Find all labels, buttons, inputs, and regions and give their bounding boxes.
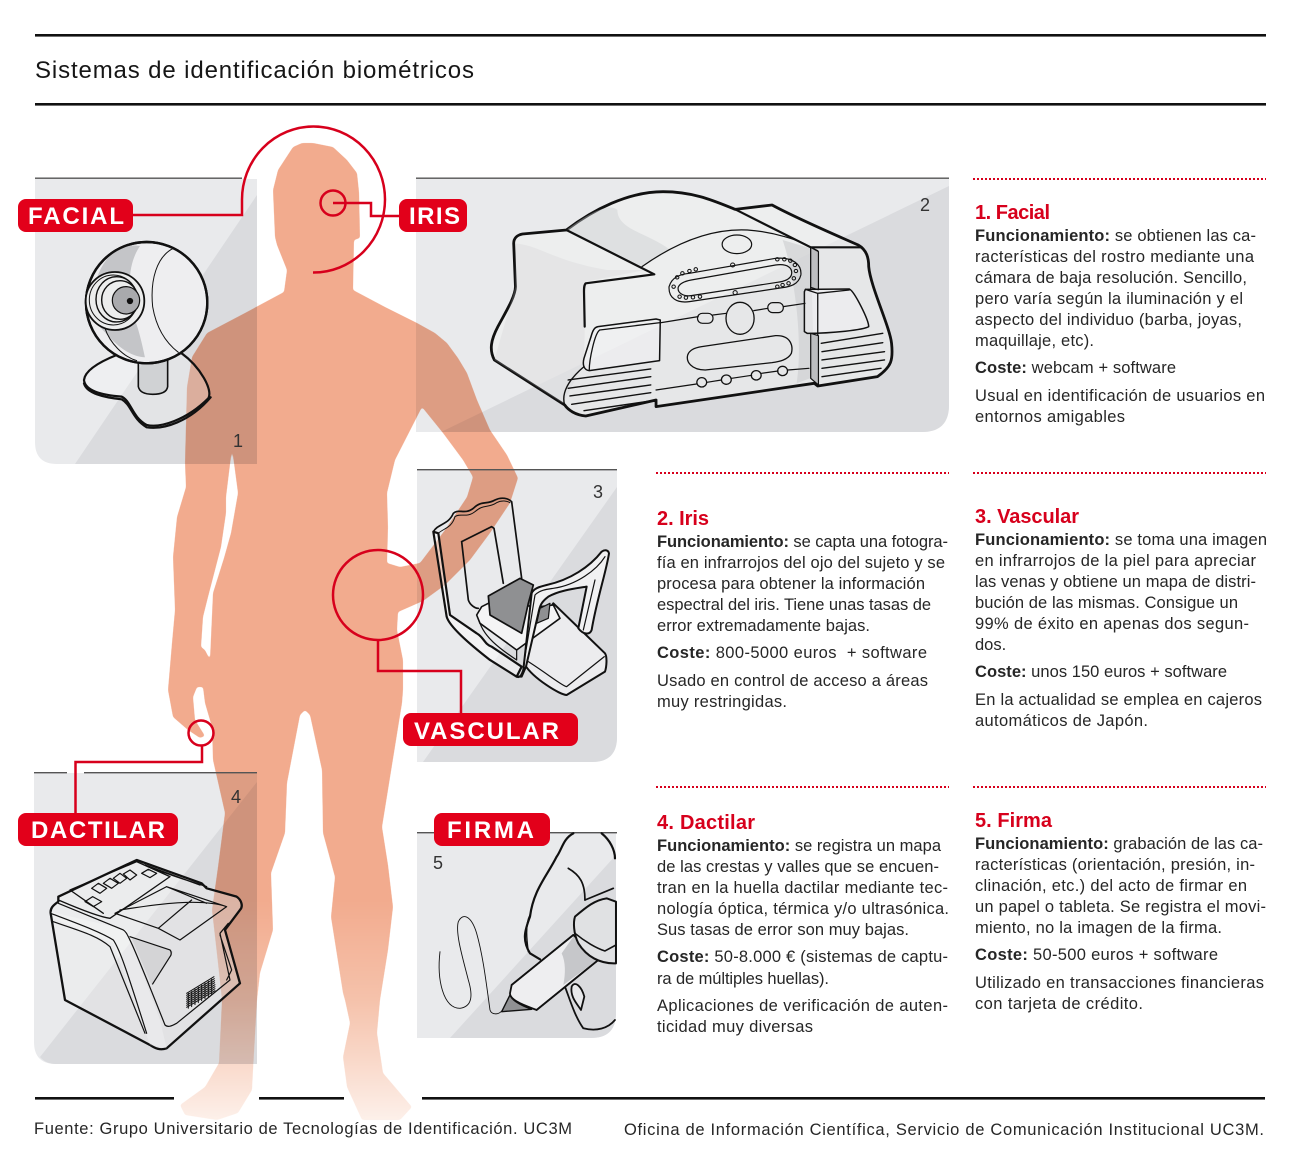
text block: 2. Iris: Funcionamiento: se capta una fotogra- <box>657 533 948 551</box>
text block: 5. Firma: Utilizado en transacciones financieras <box>975 974 1264 992</box>
text block: 5. Firma: miento, no la imagen de la firma. <box>975 919 1222 937</box>
text block: 2. Iris: 2. Iris <box>657 508 709 530</box>
connector: vascular <box>333 550 461 713</box>
footer rules <box>35 1097 1265 1100</box>
text block: 4. Dactilar <box>657 812 949 1036</box>
text block: 2. Iris: espectral del iris. Tiene unas tasas de <box>657 596 931 614</box>
title: Sistemas de identificación biométricos <box>35 57 474 84</box>
text block: 3. Vascular: las venas y obtiene un mapa de distri- <box>975 573 1256 591</box>
text block: 3. Vascular: dos. <box>975 636 1006 654</box>
text block: 2. Iris: error extremadamente bajas. <box>657 617 870 635</box>
icon: iris scanner <box>491 192 892 416</box>
label: FACIAL <box>18 199 133 232</box>
text block: 5. Firma: clinación, etc.) del acto de firmar en <box>975 877 1247 895</box>
text block: 4. Dactilar: nología óptica, térmica y/o ultrasónica. <box>657 900 949 918</box>
panel top rules <box>34 178 949 833</box>
text block: 3. Vascular: En la actualidad se emplea en cajeros <box>975 691 1262 709</box>
text block: 3. Vascular: en infrarrojos de la piel para apreciar <box>975 552 1256 570</box>
text block: 5. Firma: con tarjeta de crédito. <box>975 995 1143 1013</box>
panel: dactilar background <box>34 773 257 1064</box>
panel: firma background <box>417 833 616 1038</box>
text block: 2. Iris: muy restringidas. <box>657 693 787 711</box>
panel numbers: 5 <box>433 853 443 873</box>
text block: 5. Firma <box>975 810 1266 1013</box>
panel: facial background <box>35 179 257 464</box>
text block: 2. Iris <box>657 508 948 711</box>
text block: 4. Dactilar: de las crestas y valles que se encuen- <box>657 858 939 876</box>
header rules <box>35 34 1266 106</box>
text block: 1. Facial: entornos amigables <box>975 408 1125 426</box>
panel: vascular background <box>417 470 617 762</box>
text block: 1. Facial: Coste: webcam + software <box>975 359 1176 377</box>
connector: facial <box>133 127 385 273</box>
label: IRIS: IRIS <box>409 203 460 230</box>
text block: 1. Facial: aspecto del individuo (barba, joyas, <box>975 311 1242 329</box>
panel numbers: 3 <box>593 482 603 502</box>
text block: 3. Vascular: 99% de éxito en apenas dos segun- <box>975 615 1249 633</box>
text block: 3. Vascular: bución de las mismas. Consigue un <box>975 594 1238 612</box>
text block: 4. Dactilar: Aplicaciones de verificación de auten- <box>657 997 948 1015</box>
text block: 2. Iris: Usado en control de acceso a áreas <box>657 672 928 690</box>
text block: 4. Dactilar: ra de múltiples huellas). <box>657 970 829 988</box>
text block: 5. Firma: 5. Firma <box>975 810 1053 832</box>
text block: 5. Firma: Coste: 50-500 euros + software <box>975 946 1218 964</box>
text block: 2. Iris: fía en infrarrojos del ojo del sujeto y se <box>657 554 945 572</box>
connector: iris <box>320 190 399 216</box>
text block: 4. Dactilar: Coste: 50-8.000 € (sistemas de captu- <box>657 948 948 966</box>
icon: hand signing with pen <box>439 833 616 1030</box>
label: FIRMA <box>434 813 550 846</box>
label: VASCULAR <box>403 713 578 746</box>
text block: 1. Facial: Funcionamiento: se obtienen las ca- <box>975 227 1256 245</box>
text block: 4. Dactilar: tran en la huella dactilar mediante tec- <box>657 879 948 897</box>
text block: 1. Facial: pero varía según la iluminación y el <box>975 290 1243 308</box>
panel numbers: 2 <box>920 195 930 215</box>
text block: 1. Facial <box>975 202 1265 426</box>
text block: 1. Facial: cámara de baja resolución. Sencillo, <box>975 269 1247 287</box>
text block: 4. Dactilar: Funcionamiento: se registra un mapa <box>657 837 942 855</box>
text block: 2. Iris: procesa para obtener la información <box>657 575 925 593</box>
text block: 3. Vascular: automáticos de Japón. <box>975 712 1148 730</box>
label: DACTILAR <box>18 813 178 846</box>
text block: 1. Facial: racterísticas del rostro mediante una <box>975 248 1255 266</box>
text block: 1. Facial: 1. Facial <box>975 202 1050 224</box>
icon: vascular hand scanner <box>433 498 609 695</box>
panel numbers: 1 <box>233 431 243 451</box>
label: IRIS <box>399 199 467 232</box>
footer: source: Fuente: Grupo Universitario de Tecnologías de Identificación. UC3M <box>34 1120 572 1138</box>
text block: 1. Facial: maquillaje, etc). <box>975 332 1094 350</box>
label: FIRMA: FIRMA <box>447 817 534 844</box>
dotted separators <box>656 179 1266 787</box>
text block: 4. Dactilar: ticidad muy diversas <box>657 1018 813 1036</box>
panel numbers <box>231 195 930 873</box>
label: FACIAL: FACIAL <box>28 203 124 230</box>
panel numbers: 4 <box>231 787 241 807</box>
text block: 3. Vascular <box>975 506 1267 730</box>
text block: 3. Vascular: Coste: unos 150 euros + software <box>975 663 1227 681</box>
label: VASCULAR: VASCULAR <box>414 718 559 745</box>
panel: iris background <box>416 179 949 432</box>
text block: 3. Vascular: Funcionamiento: se toma una imagen <box>975 531 1267 549</box>
text block: 4. Dactilar: 4. Dactilar <box>657 812 755 834</box>
icon: fingerprint reader <box>51 860 242 1049</box>
human body silhouette <box>168 143 518 1120</box>
text block: 5. Firma: Funcionamiento: grabación de las ca- <box>975 835 1263 853</box>
text block: 3. Vascular: 3. Vascular <box>975 506 1079 528</box>
label: DACTILAR: DACTILAR <box>31 817 165 844</box>
icon: webcam <box>84 242 211 428</box>
text block: 2. Iris: Coste: 800-5000 euros + software <box>657 644 927 662</box>
text block: 4. Dactilar: Sus tasas de error son muy bajas. <box>657 921 909 939</box>
footer: credit: Oficina de Información Científica, Servicio de Comunicación Institucional UC3M. <box>624 1121 1264 1139</box>
text block: 1. Facial: Usual en identificación de usuarios en <box>975 387 1265 405</box>
connector: dactilar <box>76 720 214 813</box>
text block: 5. Firma: un papel o tableta. Se registra el movi- <box>975 898 1266 916</box>
text block: 5. Firma: racterísticas (orientación, presión, in- <box>975 856 1255 874</box>
